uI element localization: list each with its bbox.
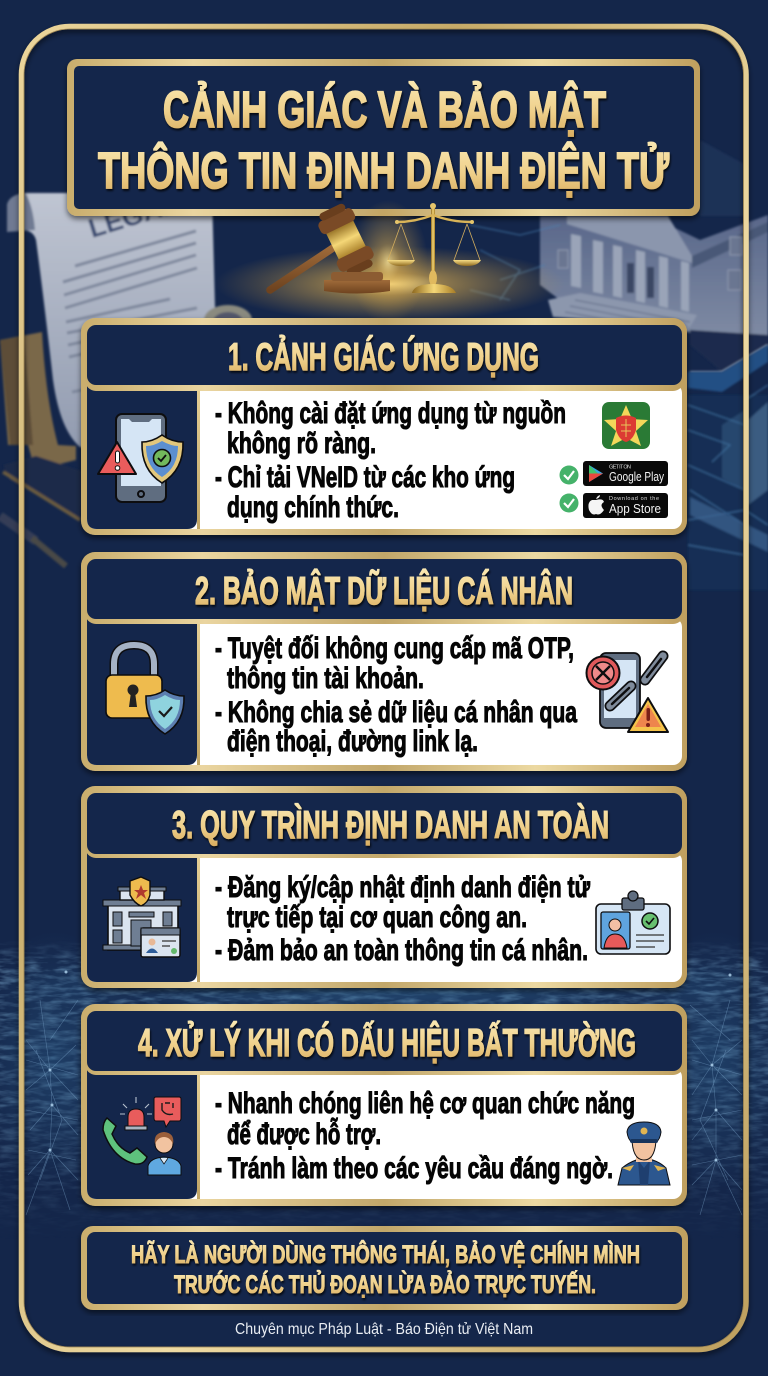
- background: legal document: [0, 188, 252, 566]
- badge: App Store: [560, 493, 668, 518]
- icon: VNeID app: [602, 402, 650, 449]
- panel 2 text: - Không chia sẻ dữ liệu cá nhân qua: [215, 696, 577, 729]
- panel 3 text: - Đảm bảo an toàn thông tin cá nhân.: [215, 934, 588, 967]
- icon: scales: [387, 203, 481, 293]
- panel 2 header: [85, 559, 684, 624]
- panel 1 text: dụng chính thức.: [227, 491, 399, 524]
- panel 3 text: [215, 871, 590, 967]
- panel 3: quy trình định danh an toàn: [81, 786, 687, 988]
- panel 1 icon column: [87, 384, 200, 529]
- source credit: Chuyên mục Pháp Luật - Báo Điện tử Việt Nam: [235, 1321, 533, 1338]
- icon: ID badge: [596, 891, 670, 954]
- background: network band: [0, 943, 768, 1216]
- panel 4 text: - Tránh làm theo các yêu cầu đáng ngờ.: [215, 1152, 613, 1185]
- background: [0, 142, 768, 1216]
- panel 3 icon column: [87, 852, 200, 982]
- badge: Google Play: Google Play: [609, 469, 664, 484]
- panel 4 header: [85, 1011, 684, 1075]
- panel 1: cảnh giác ứng dụng: [81, 318, 687, 535]
- badge: App Store: App Store: [609, 501, 661, 516]
- panel 4 text: [215, 1087, 635, 1185]
- panel 1 header: [85, 325, 684, 391]
- panel 2 header: 2. BẢO MẬT DỮ LIỆU CÁ NHÂN: [195, 569, 573, 613]
- closing message panel: [81, 1226, 688, 1310]
- panel 2: bảo mật dữ liệu cá nhân: [81, 552, 687, 771]
- panel 4 icon column: [87, 1068, 200, 1199]
- panel 2 text: [215, 632, 577, 758]
- panel 2 text: điện thoại, đường link lạ.: [227, 725, 478, 758]
- panel 1 text: - Chỉ tải VNeID từ các kho ứng: [215, 461, 515, 494]
- icon: phone with warning and shield: [98, 414, 183, 502]
- panel 1 text: - Không cài đặt ứng dụng từ nguồn: [215, 397, 566, 430]
- panel 2 text: thông tin tài khoản.: [227, 662, 424, 695]
- closing message panel: TRƯỚC CÁC THỦ ĐOẠN LỪA ĐẢO TRỰC TUYẾN.: [174, 1269, 596, 1299]
- icon: gavel: [270, 200, 390, 294]
- panel 2 text: - Tuyệt đối không cung cấp mã OTP,: [215, 632, 574, 665]
- background: legal document: LEGAL: [85, 188, 181, 244]
- background: courthouse: [540, 140, 768, 372]
- panel 1 header: 1. CẢNH GIÁC ỨNG DỤNG: [228, 335, 539, 379]
- panel 1 text: [215, 397, 566, 524]
- badge: Google Play: [560, 461, 668, 486]
- icon: broken chain on phone: [586, 653, 668, 732]
- panel 4: xử lý khi có dấu hiệu bất thường: [81, 1004, 687, 1206]
- icon: hotline operator: [103, 1097, 181, 1175]
- icon: padlock with shield: [106, 645, 184, 734]
- illustration: gavel and scales: [215, 200, 565, 324]
- panel 3 text: trực tiếp tại cơ quan công an.: [227, 901, 527, 934]
- panel 4 text: để được hỗ trợ.: [227, 1117, 381, 1151]
- panel 3 header: [85, 793, 684, 858]
- background: circuit board: [470, 225, 768, 590]
- badge: Google Play: GET IT ON: [609, 464, 631, 470]
- panel 1 text: không rõ ràng.: [227, 427, 376, 460]
- badge: App Store: Download on the: [609, 496, 659, 502]
- icon: police station: [103, 877, 181, 957]
- panel 2 icon column: [87, 618, 200, 765]
- title panel: [67, 59, 700, 216]
- icon: police officer: [618, 1122, 670, 1185]
- panel 3 text: - Đăng ký/cập nhật định danh điện tử: [215, 871, 590, 904]
